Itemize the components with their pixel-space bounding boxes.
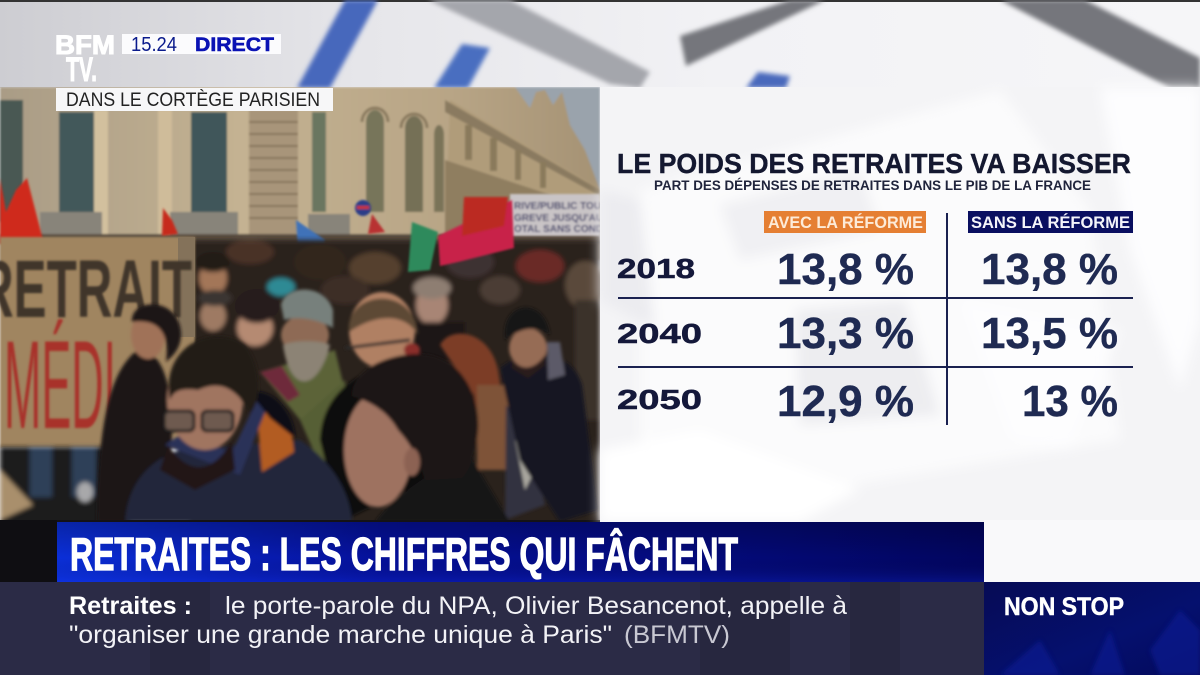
red-haired woman <box>440 334 545 520</box>
non stop label: NON STOP <box>1004 593 1124 621</box>
foreground man seen in profile <box>344 354 510 522</box>
row 2050: 2050 <box>617 384 702 415</box>
logo: BFM TV: BFM <box>55 30 115 60</box>
row 2018: 13,8 % <box>777 245 914 294</box>
heading: chart title: PART DES DÉPENSES DE RETRAITES DANS LE PIB DE LA FRANCE <box>654 178 1091 193</box>
panel: right background with soft white shapes <box>600 87 1200 582</box>
news ticker: Retraites : <box>69 592 192 620</box>
row 2018 <box>617 245 1118 294</box>
row 2050: 13 % <box>1022 377 1118 426</box>
row 2050 <box>617 377 1118 426</box>
logo: BFM TV <box>55 30 115 89</box>
column label: without the reform: SANS LA RÉFORME <box>971 213 1130 232</box>
news ticker <box>0 582 984 675</box>
time and live label: 15.24 <box>131 34 177 56</box>
heading: chart title <box>617 148 1131 193</box>
man in black at left <box>97 304 181 522</box>
top background band with blurred logo shapes <box>0 0 1200 88</box>
news ticker: le porte-parole du NPA, Olivier Besancenot, appelle à <box>225 592 847 620</box>
logo: BFM TV: TV. <box>66 51 97 89</box>
location caption: DANS LE CORTÈGE PARISIEN <box>66 90 320 111</box>
man with glasses behind <box>318 290 425 517</box>
row 2040: 13,5 % <box>981 309 1118 358</box>
man in dark hoodie at right <box>500 307 598 522</box>
photo: protest banners and flags in the crowd <box>408 197 514 272</box>
row 2018: 2018 <box>617 253 695 284</box>
time and live label <box>122 34 281 56</box>
row 2040: 13,3 % <box>777 309 914 358</box>
photo: sky and Louvre building <box>0 87 600 260</box>
non stop label <box>984 582 1200 675</box>
photo: large protest banner: MÉDI <box>4 316 116 455</box>
row 2040 <box>617 309 1118 358</box>
news ticker: "organiser une grande marche unique à Paris" <box>69 621 612 649</box>
news ticker: (BFMTV) <box>624 621 730 649</box>
photo: marchers in the foreground <box>97 289 598 522</box>
table: pension share of GDP <box>617 211 1133 426</box>
photo: red flags and road sign: GREVE JUSQU'AU <box>514 213 603 224</box>
row 2050: 12,9 % <box>777 377 914 426</box>
column label: with the reform: AVEC LA RÉFORME <box>768 213 923 232</box>
table grid lines <box>618 213 1133 425</box>
row 2040: 2040 <box>617 318 702 349</box>
panel: protest photo <box>0 87 605 582</box>
row 2018: 13,8 % <box>981 245 1118 294</box>
photo: dark crowd mass <box>190 240 605 525</box>
photo: red flags and road sign <box>0 178 603 252</box>
time and live label: DIRECT <box>195 34 274 56</box>
foreground man with glasses and blue scarf <box>125 336 352 522</box>
photo: red flags and road sign: RIVE/PUBLIC TOU <box>514 201 601 212</box>
photo: red flags and road sign: OTAL SANS COND <box>514 224 603 235</box>
photo: foreground ground <box>0 444 130 520</box>
man with grey cap and green jacket <box>260 289 346 470</box>
heading: chart title: LE POIDS DES RETRAITES VA BAISSER <box>617 148 1131 179</box>
headline bar: RETRAITES : LES CHIFFRES QUI FÂCHENT <box>70 528 738 580</box>
photo: large protest banner <box>0 237 195 455</box>
